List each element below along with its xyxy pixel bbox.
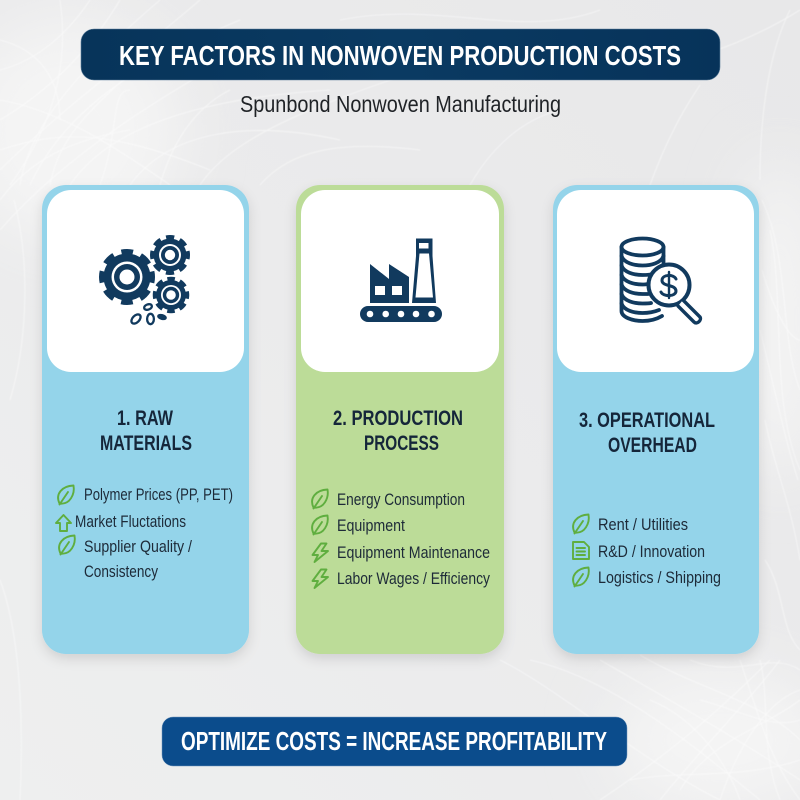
heading: operational overhead bbox=[579, 409, 715, 457]
list: production process bbox=[312, 490, 491, 588]
list: raw materials: Polymer Prices (PP, PET) bbox=[84, 486, 233, 504]
list: raw materials: Supplier Quality / bbox=[84, 538, 192, 556]
heading: production process bbox=[333, 407, 463, 455]
icon: lightning bolt bbox=[312, 570, 328, 588]
list: operational overhead: Rent / Utilities bbox=[598, 516, 688, 534]
icon: leaf bbox=[312, 490, 328, 508]
list: production process: Energy Consumption bbox=[337, 491, 465, 509]
heading: production process: 2. PRODUCTION bbox=[333, 407, 463, 430]
icon tile: raw materials bbox=[47, 190, 244, 372]
icon: gears and pellets bbox=[102, 238, 188, 325]
icon tile: operational overhead bbox=[557, 190, 754, 372]
panel: raw materials bbox=[42, 185, 249, 654]
list: operational overhead bbox=[573, 514, 721, 587]
icon: leaf bbox=[573, 568, 589, 586]
title banner bbox=[81, 29, 720, 80]
list: raw materials: Consistency bbox=[84, 563, 159, 581]
list: raw materials: Market Fluctations bbox=[75, 513, 186, 531]
list: production process: Equipment Maintenance bbox=[337, 544, 490, 562]
heading: operational overhead: 3. OPERATIONAL bbox=[579, 409, 715, 432]
list: operational overhead: Logistics / Shipping bbox=[598, 569, 721, 587]
list: raw materials bbox=[56, 486, 233, 581]
icon: leaf bbox=[312, 516, 328, 534]
icon: leaf bbox=[58, 486, 74, 504]
icon: leaf bbox=[573, 514, 589, 534]
callout: bottom banner: OPTIMIZE COSTS = INCREASE PROFITABILITY bbox=[181, 728, 607, 756]
list: production process: Equipment bbox=[337, 517, 405, 535]
callout: bottom banner bbox=[162, 717, 627, 766]
list: production process: Labor Wages / Efficiency bbox=[337, 570, 491, 588]
panel: operational overhead bbox=[553, 185, 759, 654]
heading: raw materials bbox=[100, 407, 192, 455]
icon tile: production process bbox=[301, 190, 499, 372]
panel: production process bbox=[296, 185, 504, 654]
heading: raw materials: 1. RAW bbox=[117, 407, 173, 430]
subtitle: Spunbond Nonwoven Manufacturing bbox=[240, 91, 561, 117]
list: operational overhead: R&D / Innovation bbox=[598, 543, 705, 561]
icon: document bbox=[573, 542, 589, 559]
icon: factory on conveyor bbox=[360, 238, 442, 322]
heading: raw materials: MATERIALS bbox=[100, 432, 192, 455]
icon: leaf bbox=[59, 536, 75, 554]
icon: coin stack with magnifier bbox=[622, 238, 700, 323]
heading: production process: PROCESS bbox=[364, 432, 439, 455]
icon: up arrow bbox=[56, 515, 71, 531]
heading: operational overhead: OVERHEAD bbox=[608, 434, 697, 457]
icon: lightning bolt bbox=[312, 544, 328, 562]
